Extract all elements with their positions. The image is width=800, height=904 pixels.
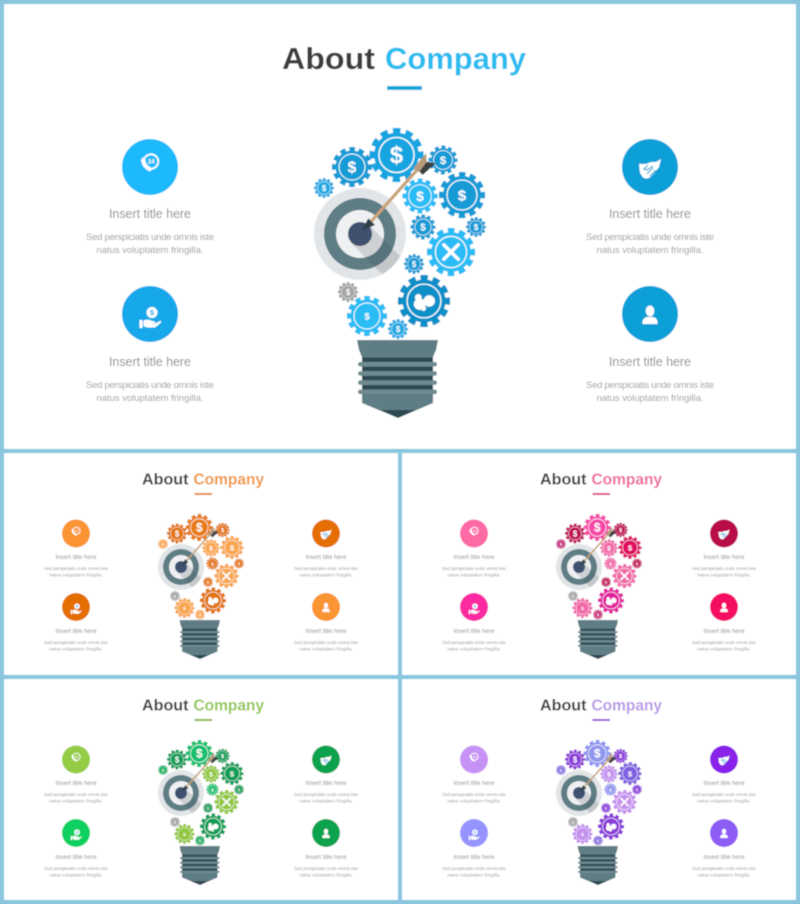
title underline bbox=[592, 719, 610, 721]
gear cluster: $ bbox=[440, 155, 447, 167]
icon: handshake bbox=[639, 159, 661, 179]
title bbox=[142, 472, 264, 488]
item: bottom left: Sed perspiciatis unde omnis iste bbox=[44, 640, 108, 646]
title: About bbox=[540, 472, 586, 488]
item: top left: natus voluptatem fringilla. bbox=[49, 798, 103, 804]
item: bottom right: natus voluptatem fringilla. bbox=[299, 872, 353, 878]
item: top left: Sed perspiciatis unde omnis iste bbox=[442, 792, 506, 798]
item: bottom right: natus voluptatem fringilla. bbox=[299, 646, 353, 652]
panel: pink slide bbox=[402, 453, 796, 675]
panel: main blue slide bbox=[4, 4, 796, 449]
item: bottom left: natus voluptatem fringilla. bbox=[447, 646, 501, 652]
gear cluster: $ bbox=[348, 160, 357, 177]
gear cluster bbox=[315, 131, 485, 338]
title bbox=[282, 41, 527, 76]
item: bottom left: Sed perspiciatis unde omnis iste bbox=[442, 640, 506, 646]
title bbox=[540, 472, 662, 488]
item: bottom right bbox=[692, 819, 756, 878]
title: Company bbox=[385, 41, 527, 76]
title underline bbox=[194, 493, 212, 495]
illustration: gear light bulb bbox=[158, 741, 244, 885]
title bbox=[142, 698, 264, 714]
arrow bbox=[362, 153, 436, 231]
panel: green slide bbox=[4, 679, 398, 900]
icon: 24 hour phone: 24 bbox=[148, 160, 155, 166]
item: top right bbox=[294, 520, 358, 578]
item: top right: natus voluptatem fringilla. bbox=[596, 245, 704, 256]
item: top left: natus voluptatem fringilla. bbox=[447, 798, 501, 804]
item: bottom left: natus voluptatem fringilla. bbox=[49, 872, 103, 878]
title bbox=[540, 698, 662, 714]
item: top left bbox=[44, 520, 108, 578]
gear cluster: $ bbox=[458, 188, 467, 205]
item: bottom right bbox=[692, 593, 756, 652]
gear cluster: $ bbox=[416, 189, 424, 204]
item: top right: Sed perspiciatis unde omnis iste bbox=[294, 566, 358, 572]
item: top right: Sed perspiciatis unde omnis iste bbox=[692, 792, 756, 798]
item: top right: Sed perspiciatis unde omnis iste bbox=[586, 232, 714, 243]
item: top left: natus voluptatem fringilla. bbox=[49, 572, 103, 578]
item: bottom left: natus voluptatem fringilla. bbox=[49, 646, 103, 652]
title: Company bbox=[592, 472, 662, 488]
item: top right: Sed perspiciatis unde omnis iste bbox=[294, 792, 358, 798]
gear cluster: $ bbox=[474, 223, 479, 232]
panel: purple slide bbox=[402, 679, 796, 900]
illustration: gear light bulb bbox=[158, 515, 244, 659]
item: top left: Sed perspiciatis unde omnis iste bbox=[86, 232, 214, 243]
item: top left bbox=[442, 746, 506, 804]
title: Company bbox=[194, 472, 264, 488]
item: bottom left bbox=[442, 593, 506, 652]
item: top right: Insert title here bbox=[306, 780, 347, 787]
title underline bbox=[387, 86, 422, 90]
item: bottom right bbox=[294, 819, 358, 878]
item: bottom left bbox=[442, 819, 506, 878]
title: Company bbox=[194, 698, 264, 714]
item: bottom right: Sed perspiciatis unde omnis iste bbox=[294, 640, 358, 646]
item: bottom left: Sed perspiciatis unde omnis iste bbox=[44, 866, 108, 872]
item: top left: Insert title here bbox=[56, 554, 97, 561]
panel: orange slide bbox=[4, 453, 398, 675]
gear cluster: $ bbox=[364, 312, 370, 323]
item: top right bbox=[692, 746, 756, 804]
item: top left: Insert title here bbox=[454, 780, 495, 787]
item: bottom right: Sed perspiciatis unde omnis iste bbox=[586, 380, 714, 391]
item: top left: Sed perspiciatis unde omnis iste bbox=[44, 792, 108, 798]
title: About bbox=[142, 472, 188, 488]
item: bottom left: Insert title here bbox=[56, 854, 97, 861]
item: bottom right: Insert title here bbox=[609, 355, 691, 369]
item: top right: Insert title here bbox=[609, 207, 691, 221]
item: top left: Sed perspiciatis unde omnis iste bbox=[44, 566, 108, 572]
item: bottom right: Sed perspiciatis unde omnis iste bbox=[692, 866, 756, 872]
title: About bbox=[540, 698, 586, 714]
gear cluster: $ bbox=[346, 288, 351, 297]
item: bottom left: Insert title here bbox=[56, 628, 97, 635]
gear cluster: $ bbox=[412, 260, 417, 269]
gear cluster: $ bbox=[322, 184, 327, 193]
target bbox=[314, 188, 410, 284]
item: bottom right: Insert title here bbox=[306, 854, 347, 861]
item: top left: natus voluptatem fringilla. bbox=[447, 572, 501, 578]
item: bottom right: Insert title here bbox=[704, 854, 745, 861]
icon: hand with coin: $ bbox=[150, 308, 155, 317]
item: bottom left: Sed perspiciatis unde omnis iste bbox=[442, 866, 506, 872]
gear cluster: $ bbox=[390, 142, 403, 169]
item: top right: Insert title here bbox=[704, 554, 745, 561]
item: top right bbox=[586, 139, 714, 256]
item: top left bbox=[44, 746, 108, 804]
title: Company bbox=[592, 698, 662, 714]
item: bottom right bbox=[294, 593, 358, 652]
item: top left: natus voluptatem fringilla. bbox=[96, 245, 204, 256]
item: bottom left: Insert title here bbox=[109, 355, 191, 369]
item: bottom left: Insert title here bbox=[454, 854, 495, 861]
item: top left: Insert title here bbox=[56, 780, 97, 787]
title: About bbox=[142, 698, 188, 714]
item: bottom left: natus voluptatem fringilla. bbox=[447, 872, 501, 878]
item: bottom right: Insert title here bbox=[704, 628, 745, 635]
title: About bbox=[282, 41, 375, 76]
item: bottom left bbox=[86, 286, 214, 404]
item: bottom right: natus voluptatem fringilla. bbox=[596, 393, 704, 404]
item: top right bbox=[692, 520, 756, 578]
item: bottom right: Insert title here bbox=[306, 628, 347, 635]
item: bottom left: Insert title here bbox=[454, 628, 495, 635]
illustration: gear light bulb bbox=[556, 515, 642, 659]
item: top left bbox=[86, 139, 214, 256]
item: bottom right bbox=[586, 286, 714, 404]
title underline bbox=[592, 493, 610, 495]
item: bottom right: Sed perspiciatis unde omnis iste bbox=[692, 640, 756, 646]
icon: person bbox=[642, 306, 658, 324]
item: bottom left: natus voluptatem fringilla. bbox=[96, 393, 204, 404]
item: bottom right: Sed perspiciatis unde omnis iste bbox=[294, 866, 358, 872]
item: top right: Sed perspiciatis unde omnis iste bbox=[692, 566, 756, 572]
bulb base bbox=[357, 340, 438, 418]
item: top left: Insert title here bbox=[454, 554, 495, 561]
illustration: gear light bulb bbox=[556, 741, 642, 885]
item: bottom left: Sed perspiciatis unde omnis iste bbox=[86, 380, 214, 391]
item: bottom right: natus voluptatem fringilla. bbox=[697, 646, 751, 652]
item: bottom left bbox=[44, 593, 108, 652]
item: top right: natus voluptatem fringilla. bbox=[299, 798, 353, 804]
item: top right: natus voluptatem fringilla. bbox=[697, 798, 751, 804]
gear cluster: $ bbox=[396, 325, 401, 334]
illustration: gear light bulb bbox=[314, 131, 485, 418]
item: top right: natus voluptatem fringilla. bbox=[697, 572, 751, 578]
title underline bbox=[194, 719, 212, 721]
item: top right: Insert title here bbox=[306, 554, 347, 561]
item: top right: Insert title here bbox=[704, 780, 745, 787]
item: top right: natus voluptatem fringilla. bbox=[299, 572, 353, 578]
item: top left: Insert title here bbox=[109, 207, 191, 221]
item: top right bbox=[294, 746, 358, 804]
item: bottom left bbox=[44, 819, 108, 878]
item: top left bbox=[442, 520, 506, 578]
item: bottom right: natus voluptatem fringilla. bbox=[697, 872, 751, 878]
gear cluster: $ bbox=[420, 222, 426, 234]
item: top left: Sed perspiciatis unde omnis iste bbox=[442, 566, 506, 572]
